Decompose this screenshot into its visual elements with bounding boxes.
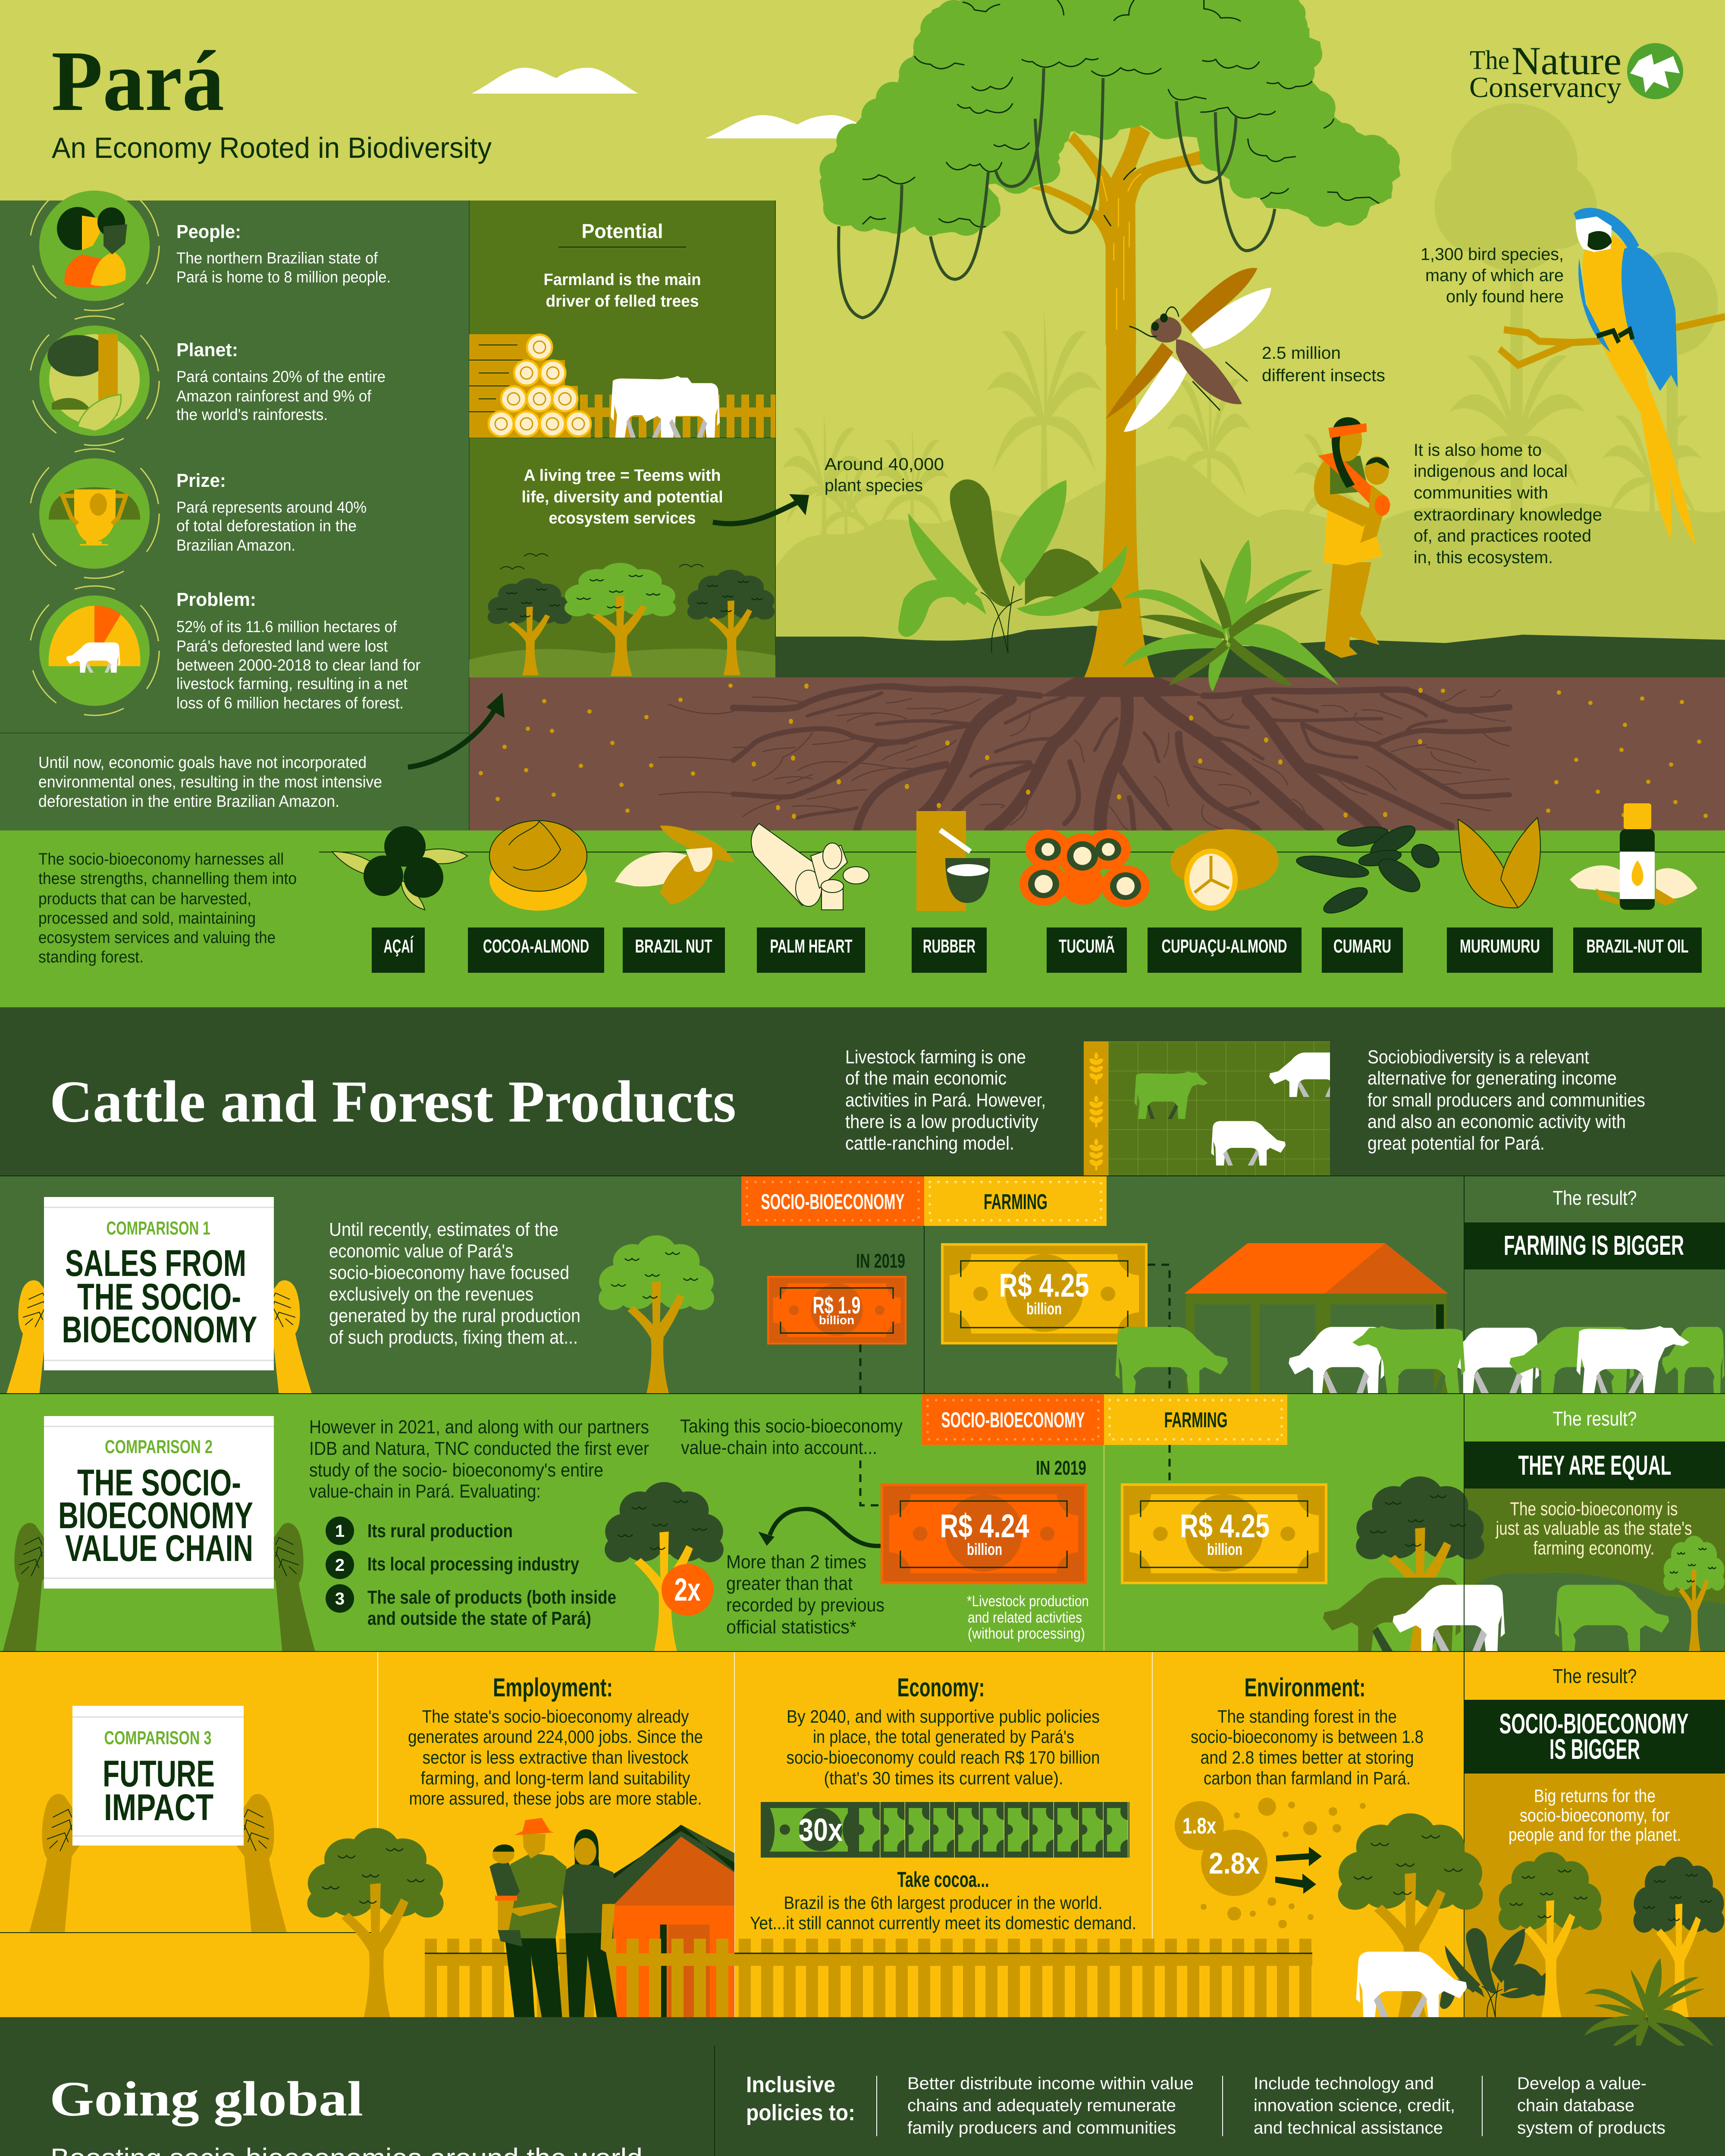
text: problem: 52% of its 11.6 million hectares of: [176, 618, 397, 636]
icon: açaí: [332, 826, 467, 910]
communities label: communities with: [1414, 483, 1548, 502]
icon: people: [30, 181, 159, 310]
trees in result panel: [1499, 1852, 1724, 2018]
footnote: (without processing): [968, 1625, 1085, 1642]
text: prize: Prize:: [176, 470, 226, 491]
icon: cocoa-almond: [489, 821, 587, 911]
text: policy 3: chain database: [1517, 2096, 1634, 2115]
text: policy 2: [1254, 2074, 1455, 2137]
text: people: People:: [176, 221, 241, 242]
plant species label: plant species: [825, 476, 923, 495]
tab: farming: FARMING: [984, 1190, 1048, 1214]
label: palm heart: PALM HEART: [770, 936, 853, 957]
banknote: R$ 4.25 billion: R$ 4.25: [1180, 1508, 1270, 1545]
pasture graphic: [1084, 1041, 1348, 1176]
text: socio-bioeconomy intro: standing forest.: [38, 948, 144, 966]
banknote: R$ 1.9 billion: [767, 1276, 906, 1344]
tree roots: [659, 677, 1509, 831]
text: livestock farming: cattle-ranching model.: [845, 1133, 1014, 1154]
background: sky: [0, 0, 1725, 690]
label: tucumã: TUCUMÃ: [1059, 935, 1115, 957]
numbered list: 1: [335, 1522, 345, 1541]
numbered list: and outside the state of Pará): [367, 1608, 591, 1629]
label: açaí: [372, 928, 425, 973]
text: more than 2 times: recorded by previous: [726, 1595, 884, 1616]
panel: products band: [0, 803, 1725, 1008]
label: rubber: RUBBER: [923, 936, 975, 957]
tree canopy: [820, 0, 1401, 318]
label: in 2019: IN 2019: [856, 1250, 905, 1272]
text: policy 2: Include technology and: [1254, 2074, 1434, 2093]
text: until recently: socio-bioeconomy have focused: [329, 1262, 569, 1283]
heading: potential: Potential: [581, 220, 663, 242]
icon: tucumã: [1019, 830, 1150, 907]
text: policy 2: and technical assistance: [1254, 2118, 1443, 2137]
heading: inclusive policies: policies to:: [746, 2100, 855, 2125]
fence over house: [604, 1939, 734, 2017]
text: economy: in place, the total generated by Pará's: [813, 1727, 1074, 1747]
text: sociobiodiversity: alternative for generating income: [1367, 1068, 1617, 1089]
bird species label: many of which are: [1425, 266, 1564, 285]
icon: cupuaçu-almond: [1170, 829, 1279, 911]
tab: farming: [1104, 1395, 1287, 1445]
text: taking this: Taking this socio-bioeconomy: [680, 1416, 903, 1437]
soil dots: [479, 683, 1708, 819]
arrows to tree: [1275, 1847, 1322, 1894]
label: rubber: [912, 928, 987, 973]
tree: [599, 1235, 714, 1394]
felled logs: [469, 334, 591, 438]
panel: going global background: [0, 2017, 1725, 2156]
heading: going global: Going global: [50, 2071, 363, 2126]
label: in 2019: IN 2019: [1036, 1457, 1086, 1479]
text: however in 2021: study of the socio- bioeconomy's entire: [309, 1460, 603, 1481]
text: until recently: economic value of Pará's: [329, 1241, 513, 1262]
result: socio-bioeconomy is bigger: [1464, 1665, 1725, 1845]
vines: [839, 68, 1275, 318]
insects label: 2.5 million: [1262, 344, 1341, 363]
result: socio-bioeconomy is bigger: socio-bioeconomy, for: [1520, 1805, 1670, 1825]
woman and baby: [1314, 417, 1390, 658]
text: prize: Pará represents around 40%: [176, 498, 367, 516]
logo: The Nature Conservancy: The: [1470, 46, 1509, 75]
text: take cocoa: Brazil is the 6th largest producer in the world.: [784, 1893, 1102, 1913]
text: until now: Until now, economic goals have not incorporated: [38, 754, 367, 772]
plant species label: Around 40,000: [825, 455, 944, 474]
arrow: living tree to forest: [713, 494, 809, 524]
text: employment: more assured, these jobs are more stable.: [409, 1788, 702, 1808]
canopy lobes: [820, 0, 1400, 236]
fern plant: [1123, 539, 1339, 692]
communities label: extraordinary knowledge: [1414, 505, 1602, 524]
canopy scallops: [862, 0, 1379, 227]
label: murumuru: MURUMURU: [1460, 936, 1540, 957]
sign: comparison 2: [44, 1416, 274, 1589]
logo: The Nature Conservancy: Conservancy: [1469, 71, 1622, 103]
tree and cattle: [1323, 1476, 1725, 1652]
callout: 2x: [662, 1564, 713, 1616]
cloud: [705, 115, 856, 138]
text: livestock farming: Livestock farming is one: [845, 1047, 1026, 1068]
panel: potential: [469, 201, 775, 833]
text: farmland: [543, 271, 701, 310]
insects label: different insects: [1262, 366, 1385, 385]
text: employment: The state's socio-bioeconomy already: [422, 1706, 689, 1727]
banknote: R$ 4.25 billion: billion: [1026, 1300, 1062, 1318]
text: living tree: A living tree = Teems with: [524, 467, 721, 485]
label: brazil nut: BRAZIL NUT: [635, 936, 712, 957]
label: tucumã: [1047, 928, 1127, 973]
plant species label: [825, 455, 944, 495]
panel: comparison 2: [0, 1394, 1725, 1652]
tab: socio-bioeconomy: [741, 1176, 924, 1226]
text: socio-bioeconomy intro: The socio-bioeconomy harnesses all: [38, 850, 284, 868]
tree trunk lower: [1084, 323, 1155, 679]
panel: inclusive policies: [715, 2046, 1725, 2156]
text: policy 1: [907, 2074, 1194, 2137]
text: policy 1: chains and adequately remunerate: [907, 2096, 1176, 2115]
text: environment: The standing forest in the: [1217, 1706, 1397, 1727]
tree: [605, 1482, 724, 1652]
communities label: in, this ecosystem.: [1414, 548, 1553, 567]
text: more than 2 times: More than 2 times: [726, 1551, 866, 1573]
text: however in 2021: value-chain in Pará. Evaluating:: [309, 1481, 541, 1502]
banknote: R$ 1.9 billion: billion: [819, 1313, 854, 1327]
arrow: until now to soil: [408, 693, 505, 767]
banknote: R$ 4.24 billion: [881, 1483, 1087, 1584]
carbon bubbles: 2.8x: [1209, 1846, 1260, 1880]
icon: problem: [30, 586, 159, 715]
text: however in 2021: However in 2021, and along with our partners: [309, 1416, 649, 1438]
text: prize: [176, 470, 367, 554]
text: prize: of total deforestation in the: [176, 517, 357, 535]
banana plant: [898, 479, 1127, 656]
fern overlapping section boundary: [1584, 1958, 1715, 2051]
bird species label: only found here: [1446, 287, 1564, 306]
tab: socio-bioeconomy: SOCIO-BIOECONOMY: [761, 1190, 905, 1214]
sign: comparison 3: COMPARISON 3: [104, 1727, 211, 1749]
text: socio-bioeconomy intro: [38, 850, 297, 966]
text: take cocoa: [750, 1868, 1136, 1933]
trees in potential panel: [469, 554, 775, 677]
panel: comparison 1: [0, 1176, 1725, 1394]
text: until now: deforestation in the entire Brazilian Amazon.: [38, 793, 339, 811]
banknote: R$ 4.25 billion: billion: [1207, 1541, 1242, 1559]
arrow and dashed connector: [758, 1460, 881, 1546]
text: economy: (that's 30 times its current value).: [824, 1768, 1063, 1788]
white cow: [611, 376, 701, 438]
tab: socio-bioeconomy: [922, 1395, 1104, 1445]
label: cumaru: [1322, 928, 1403, 973]
text: problem: [176, 589, 420, 712]
text: until now: environmental ones, resulting in the most intensive: [38, 773, 382, 791]
text: environment: carbon than farmland in Pará.: [1204, 1768, 1411, 1788]
sign: comparison 1: THE SOCIO-: [77, 1276, 241, 1318]
heading: cattle and forest products: Cattle and Forest Products: [50, 1069, 736, 1134]
tree: [307, 1828, 444, 2018]
text: until now: [38, 754, 382, 811]
sign: comparison 1: [44, 1197, 274, 1370]
text: sociobiodiversity: for small producers and communities: [1367, 1090, 1645, 1111]
text: livestock farming: activities in Pará. However,: [845, 1090, 1046, 1111]
text: employment: generates around 224,000 jobs. Since the: [408, 1727, 703, 1747]
parrot on branch: [1499, 208, 1725, 546]
text: livestock farming: there is a low productivity: [845, 1111, 1038, 1132]
text: until recently: generated by the rural production: [329, 1305, 580, 1326]
text: policy 2: innovation science, credit,: [1254, 2096, 1455, 2115]
ground strip: [775, 626, 1725, 679]
icon: planet: [30, 316, 159, 445]
text: environment: Environment:: [1245, 1673, 1365, 1702]
result: socio-bioeconomy is bigger: IS BIGGER: [1549, 1733, 1640, 1765]
sign: comparison 1: SALES FROM: [65, 1243, 246, 1284]
text: socio-bioeconomy intro: ecosystem services and valuing the: [38, 929, 276, 947]
tree trunk upper and branches: [1031, 125, 1204, 345]
text: livestock farming: of the main economic: [845, 1068, 1007, 1089]
insects label: [1262, 344, 1385, 385]
hands holding sign: [6, 1280, 312, 1394]
tab: farming: FARMING: [1164, 1408, 1227, 1432]
carbon bubbles: [1175, 1798, 1366, 1928]
banknote: R$ 4.25 billion: R$ 4.25: [999, 1267, 1089, 1304]
communities label: It is also home to: [1414, 441, 1542, 460]
text: however in 2021: [309, 1416, 649, 1502]
heading: Pará: Pará: [51, 34, 224, 129]
label: brazil-nut oil: [1573, 928, 1702, 973]
sign: comparison 1: BIOECONOMY: [62, 1309, 257, 1351]
sign: comparison 2: COMPARISON 2: [105, 1436, 213, 1457]
text: sociobiodiversity: Sociobiodiversity is a relevant: [1367, 1047, 1589, 1068]
label: cumaru: CUMARU: [1333, 936, 1391, 957]
insect: [1106, 268, 1271, 432]
text: employment: Employment:: [493, 1673, 613, 1702]
text: more than 2 times: official statistics*: [726, 1617, 856, 1638]
text: environment: and 2.8 times better at storing: [1201, 1747, 1414, 1767]
label: brazil nut: [623, 928, 725, 973]
text: living tree: [522, 467, 723, 527]
text: living tree: ecosystem services: [549, 509, 696, 527]
barn: [1184, 1243, 1448, 1394]
text: more than 2 times: [726, 1551, 884, 1638]
result: they are equal: [1464, 1407, 1725, 1559]
text: however in 2021: IDB and Natura, TNC conducted the first ever: [309, 1438, 649, 1459]
sign: comparison 3: IMPACT: [104, 1787, 213, 1828]
numbered list: 3: [335, 1589, 345, 1608]
hands holding sign: [29, 1794, 287, 1932]
numbered list: Its rural production: [367, 1520, 513, 1542]
text: until recently: of such products, fixing them at...: [329, 1327, 578, 1348]
background: rainforest silhouettes: [775, 103, 1725, 646]
sign: comparison 3: [72, 1706, 244, 1846]
text: economy: By 2040, and with supportive public policies: [787, 1706, 1100, 1727]
label: cocoa-almond: COCOA-ALMOND: [483, 936, 589, 957]
banknote stack: 30x: [761, 1802, 1129, 1858]
text: socio-bioeconomy intro: these strengths, channelling them into: [38, 870, 297, 888]
text: planet: Pará contains 20% of the entire: [176, 368, 386, 385]
numbered list: Its local processing industry: [367, 1554, 579, 1575]
bird species label: 1,300 bird species,: [1421, 245, 1564, 264]
text: planet: Amazon rainforest and 9% of: [176, 387, 372, 405]
icon: palm heart: [751, 824, 869, 910]
result background: [1464, 1489, 1725, 1652]
numbered list: [326, 1517, 616, 1629]
sign: comparison 2: THE SOCIO-: [77, 1462, 241, 1504]
text: sociobiodiversity: and also an economic activity with: [1367, 1111, 1626, 1132]
communities label: of, and practices rooted: [1414, 526, 1591, 545]
icon: cumaru: [1295, 820, 1443, 918]
sign: comparison 3: FUTURE: [103, 1753, 215, 1795]
footnote: *Livestock production: [967, 1593, 1089, 1610]
fence: [580, 395, 775, 438]
soil band with roots: [469, 677, 1725, 833]
numbered list: 2: [335, 1556, 345, 1575]
text: economy: [787, 1673, 1100, 1788]
communities label: [1414, 441, 1602, 567]
tree and cow: [1338, 1813, 1556, 2019]
label: cupuaçu-almond: [1148, 928, 1302, 973]
text: problem: Problem:: [176, 589, 256, 610]
result: farming is bigger: [1464, 1187, 1725, 1269]
text: planet: [176, 339, 386, 423]
text: planet: Planet:: [176, 339, 238, 360]
result: farming is bigger: The result?: [1552, 1187, 1637, 1209]
text: economy: socio-bioeconomy could reach R$ 170 billion: [787, 1747, 1100, 1767]
cattle herd: [1115, 1326, 1725, 1394]
text: until recently: Until recently, estimates of the: [329, 1219, 558, 1240]
result: they are equal: The result?: [1552, 1407, 1637, 1430]
banknote: R$ 4.24 billion: R$ 4.24: [940, 1508, 1029, 1545]
text: employment: farming, and long-term land suitability: [421, 1768, 690, 1788]
text: more than 2 times: greater than that: [726, 1573, 853, 1594]
text: environment: socio-bioeconomy is between 1.8: [1191, 1727, 1424, 1747]
result: socio-bioeconomy is bigger: The result?: [1552, 1665, 1637, 1687]
text: taking this: value-chain into account...: [681, 1437, 877, 1458]
heading: inclusive policies: Inclusive: [746, 2072, 835, 2097]
text: economy: Economy:: [897, 1673, 985, 1702]
heading: inclusive policies: [746, 2072, 855, 2125]
text: sociobiodiversity: great potential for Pará.: [1367, 1133, 1545, 1154]
text: socio-bioeconomy intro: products that can be harvested,: [38, 890, 251, 908]
text: planet: the world's rainforests.: [176, 406, 328, 423]
logo: The Nature Conservancy: [1469, 39, 1683, 103]
text: livestock farming: [845, 1047, 1046, 1154]
text: taking this: [680, 1416, 903, 1458]
carbon bubbles: 1.8x: [1182, 1814, 1216, 1839]
text: take cocoa: Take cocoa...: [897, 1868, 989, 1892]
footnote: and related activties: [968, 1609, 1082, 1626]
icon: brazil nut: [615, 826, 734, 905]
result: they are equal: farming economy.: [1534, 1538, 1654, 1559]
icon: prize: [30, 449, 159, 578]
text: problem: livestock farming, resulting in a net: [176, 675, 408, 693]
text: problem: between 2000-2018 to clear land for: [176, 656, 420, 674]
icon: rubber: [916, 811, 990, 911]
family: [489, 1818, 617, 2018]
sign: comparison 1: COMPARISON 1: [106, 1218, 210, 1239]
icon: brazil-nut oil: [1570, 803, 1697, 910]
tab: farming: [924, 1176, 1107, 1226]
text: sociobiodiversity: [1367, 1047, 1645, 1154]
callout: 2x: 2x: [674, 1572, 700, 1608]
label: açaí: AÇAÍ: [384, 935, 414, 957]
result: socio-bioeconomy is bigger: Big returns for the: [1534, 1786, 1656, 1806]
icon: murumuru: [1458, 818, 1540, 908]
text: take cocoa: Yet...it still cannot currently meet its domestic demand.: [750, 1913, 1136, 1933]
fence: [425, 1939, 1312, 2017]
text: people: The northern Brazilian state of: [176, 249, 378, 267]
text: employment: sector is less extractive than livestock: [423, 1747, 689, 1767]
banknote: R$ 4.25 billion: [941, 1243, 1148, 1344]
text: employment: [408, 1673, 703, 1808]
text: prize: Brazilian Amazon.: [176, 536, 295, 554]
result: they are equal: The socio-bioeconomy is: [1510, 1498, 1678, 1520]
text: policy 3: system of products: [1517, 2118, 1665, 2137]
panel: people, planet, prize, problem: [0, 181, 469, 833]
text: farmland: Farmland is the main: [543, 271, 701, 289]
hands holding sign: [3, 1523, 315, 1652]
text: problem: Pará's deforested land were lost: [176, 637, 388, 655]
text: environment: [1191, 1673, 1424, 1788]
white cow: [641, 383, 720, 438]
cloud: [471, 68, 638, 94]
numbered list: The sale of products (both inside: [367, 1587, 616, 1608]
text: living tree: life, diversity and potential: [522, 488, 723, 506]
house: [611, 1825, 734, 2018]
communities label: indigenous and local: [1414, 462, 1568, 481]
dashed connector: [860, 1265, 1170, 1394]
banknote: R$ 4.25 billion: [1121, 1483, 1327, 1584]
panel: comparison 3: [0, 1651, 1725, 2024]
logo: The Nature Conservancy: Nature: [1512, 39, 1622, 83]
main tree: [820, 0, 1401, 679]
text: until recently: [329, 1219, 580, 1348]
label: murumuru: [1447, 928, 1553, 973]
text: socio-bioeconomy intro: processed and sold, maintaining: [38, 909, 256, 928]
text: policy 3: Develop a value-: [1517, 2074, 1647, 2093]
text: until recently: exclusively on the revenues: [329, 1284, 533, 1305]
text: people: Pará is home to 8 million people.: [176, 268, 391, 286]
banknote stack: 30x: 30x: [799, 1812, 843, 1848]
text: problem: loss of 6 million hectares of forest.: [176, 694, 404, 712]
text: policy 3: [1517, 2074, 1665, 2137]
tab: socio-bioeconomy: SOCIO-BIOECONOMY: [941, 1408, 1085, 1432]
label: cocoa-almond: [468, 928, 604, 973]
subtitle: An Economy Rooted in Biodiversity: [52, 132, 492, 164]
label: cupuaçu-almond: CUPUAÇU-ALMOND: [1162, 936, 1287, 957]
text: policy 1: Better distribute income within value: [907, 2074, 1194, 2093]
text: people: [176, 221, 391, 286]
banknote: R$ 4.24 billion: billion: [967, 1541, 1002, 1559]
panel: cattle and forest products header: [0, 1007, 1725, 1176]
result: socio-bioeconomy is bigger: people and for the planet.: [1509, 1824, 1681, 1845]
footnote: [967, 1593, 1089, 1642]
text: policy 1: family producers and communities: [907, 2118, 1176, 2137]
text: farmland: driver of felled trees: [546, 292, 699, 310]
bird species label: [1421, 245, 1564, 306]
label: palm heart: [757, 928, 865, 973]
banknote: R$ 1.9 billion: R$ 1.9: [812, 1291, 861, 1319]
sign: comparison 2: BIOECONOMY: [58, 1495, 253, 1536]
sign: comparison 2: VALUE CHAIN: [65, 1528, 253, 1569]
